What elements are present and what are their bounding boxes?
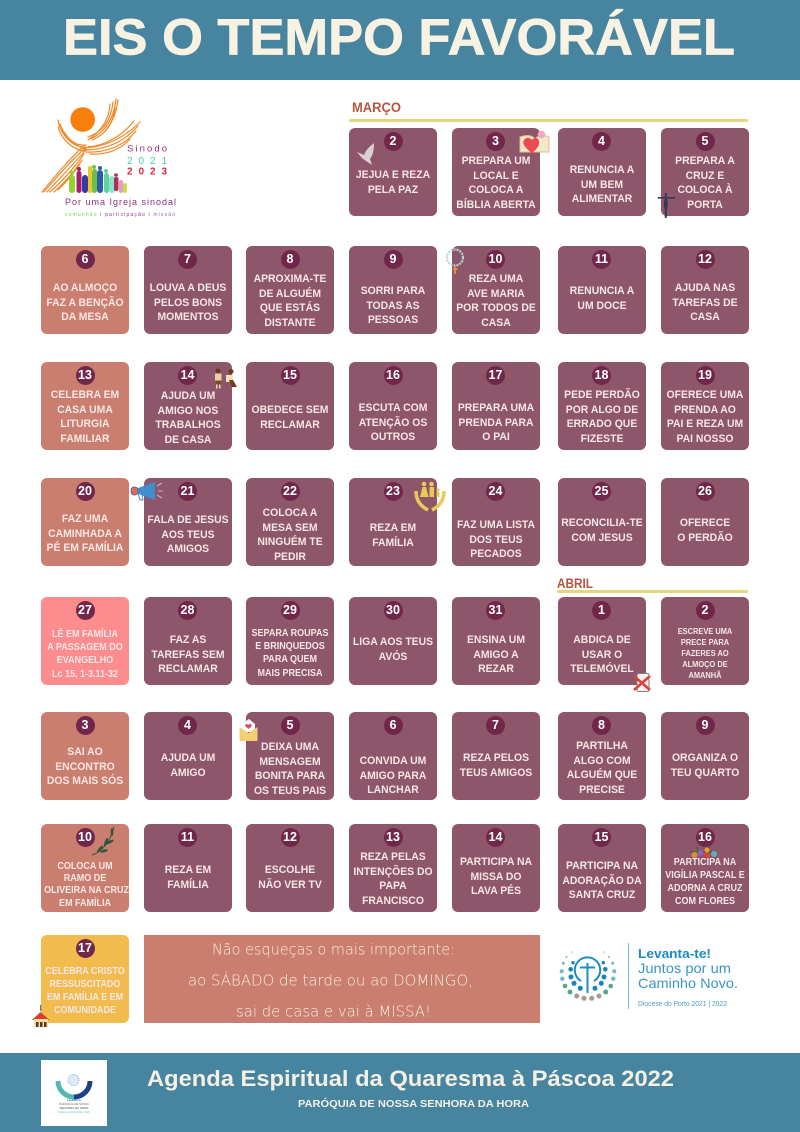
card: março 4: ALIMENTAR <box>571 193 632 205</box>
card: março 10: CASA <box>481 317 510 329</box>
footer band <box>0 1053 800 1132</box>
card: março 6: 6 <box>82 252 88 266</box>
card: março 14 <box>144 362 232 450</box>
parish logo box <box>41 1060 107 1126</box>
card: abril 14: LAVA PÉS <box>470 885 521 897</box>
card: abril 14: PARTICIPA NA <box>459 856 532 868</box>
card: abril 15: ADORAÇÃO DA <box>562 875 641 887</box>
icon: olive branch <box>92 827 114 855</box>
card: março 2: JEJUA E REZA <box>356 169 430 181</box>
card: abril 8: 8 <box>598 718 605 732</box>
card: abril 6: AMIGO PARA <box>360 770 426 782</box>
card: abril 3: ENCONTRO <box>55 761 115 773</box>
card: abril 17: EM FAMÍLIA E EM <box>47 992 123 1003</box>
card: abril 7: TEUS AMIGOS <box>459 767 532 779</box>
card: março 3: 3 <box>492 134 499 148</box>
card: abril 1: ABDICA DE <box>573 634 630 646</box>
card: março 3: BÍBLIA ABERTA <box>456 199 535 211</box>
card: março 10: AVE MARIA <box>467 288 524 300</box>
card: abril 7: REZA PELOS <box>462 752 529 764</box>
card: março 22: MESA SEM <box>262 522 318 534</box>
card: março 25: RECONCILIA-TE <box>561 517 642 529</box>
card: março 22: 22 <box>283 484 297 498</box>
card: março 6: FAZ A BENÇÃO <box>46 297 124 309</box>
card: março 23: FAMÍLIA <box>372 537 414 549</box>
card: março 26: 26 <box>698 484 712 498</box>
logo: paróquia: PARÓQUIA DE NOSSA <box>59 1101 89 1106</box>
card: abril 16: VIGÍLIA PASCAL E <box>665 870 745 881</box>
logo: levanta-te diocese: Diocese do Porto 2021 | 2022 <box>638 1001 727 1008</box>
card: abril 5: OS TEUS PAIS <box>254 785 326 797</box>
card: abril 1: USAR O <box>581 649 622 661</box>
card: abril 3: 3 <box>82 718 88 732</box>
card: março 12 <box>661 246 749 334</box>
card: abril 7 <box>452 712 540 800</box>
card: abril 11 <box>144 824 232 912</box>
card: abril 14: MISSA DO <box>470 871 521 883</box>
card: abril 12: 12 <box>283 830 297 844</box>
card: abril 9 <box>661 712 749 800</box>
card: abril 9: TEU QUARTO <box>671 767 739 779</box>
logo: paróquia: Diocese do Porto 2021 | 2022 <box>58 1111 90 1114</box>
card: março 4: RENUNCIA A <box>569 164 634 176</box>
card: março 12: AJUDA NAS <box>675 282 735 294</box>
card: abril 5: MENSAGEM <box>259 756 321 768</box>
card: abril 17: COMUNIDADE <box>54 1005 116 1016</box>
logo: levanta-te diocese: Caminho Novo. <box>638 975 738 991</box>
card: março 8: DISTANTE <box>264 317 316 329</box>
card: março 28: RECLAMAR <box>158 663 217 675</box>
card: março 5: PREPARA A <box>675 155 735 167</box>
month rule: abril <box>557 590 748 592</box>
card: março 16 <box>349 362 437 450</box>
card: abril 8: PARTILHA <box>576 740 627 752</box>
card: abril 17: CELEBRA CRISTO <box>45 966 125 976</box>
card: março 6: DA MESA <box>61 311 109 323</box>
card: março 7: LOUVA A DEUS <box>149 282 226 294</box>
card: abril 10: 10 <box>78 830 92 844</box>
card: março 18: 18 <box>595 368 608 382</box>
card: março 8: QUE ESTÁS <box>260 302 320 314</box>
card: março 7: MOMENTOS <box>157 311 218 323</box>
card: março 17: PREPARA UMA <box>457 402 534 414</box>
card: março 20: PÉ EM FAMÍLIA <box>47 542 123 554</box>
card: março 17: PRENDA PARA <box>458 417 533 429</box>
logo: sínodo 2021-2023: Sinodo <box>127 144 167 154</box>
card: março 3: COLOCA A <box>468 184 523 196</box>
logo: paróquia: Levanta-te <box>67 1098 81 1102</box>
card: abril 9: ORGANIZA O <box>672 752 738 764</box>
card: abril 16: COM FLORES <box>675 896 735 907</box>
card: abril 2: ESCREVE UMA <box>678 626 732 636</box>
card: abril 2: AMANHÃ <box>688 670 722 680</box>
card: abril 8: ALGO COM <box>573 755 630 767</box>
card: março 3 <box>452 128 540 216</box>
card: março 3: PREPARA UM <box>461 155 530 167</box>
card: abril 5 <box>246 712 334 800</box>
logo: paróquia: SENHORA DA HORA <box>59 1106 89 1110</box>
card: março 22: COLOCA A <box>263 507 317 519</box>
card: abril 10: COLOCA UM <box>57 860 113 872</box>
card: março 28: 28 <box>181 603 194 617</box>
card: abril 13: 13 <box>386 830 400 844</box>
card: março 18: POR ALGO DE <box>565 404 638 416</box>
card: março 8: DE ALGUÉM <box>259 288 321 300</box>
card: março 27: A PASSAGEM DO <box>47 642 123 653</box>
card: março 19: PAI NOSSO <box>676 433 734 445</box>
card: março 25: COM JESUS <box>571 532 632 544</box>
card: abril 17: 17 <box>78 941 92 955</box>
card: março 30 <box>349 597 437 685</box>
card: março 16: 16 <box>386 368 400 382</box>
card: abril 2: FAZERES AO <box>681 648 729 658</box>
icon: megaphone <box>131 482 163 500</box>
card: março 16: OUTROS <box>371 431 415 443</box>
callout text: sai de casa e vai à MISSA! <box>236 1002 431 1020</box>
card: março 23 <box>349 478 437 566</box>
card: abril 8: PRECISE <box>579 784 624 796</box>
card: abril 3: SAI AO <box>67 746 103 758</box>
card: março 31: 31 <box>489 603 502 617</box>
card: abril 1: TELEMÓVEL <box>570 663 633 675</box>
logo: sínodo 2021-2023: Por uma Igreja sinodal <box>65 197 176 207</box>
card: março 28: FAZ AS <box>169 634 206 646</box>
card: abril 15: 15 <box>595 830 608 844</box>
card: abril 10: RAMO DE <box>64 873 106 884</box>
card: março 19: OFERECE UMA <box>667 389 743 401</box>
logo: sínodo 2021-2023: 2021 <box>127 156 167 167</box>
card: março 22: PEDIR <box>274 551 306 563</box>
card: abril 14: 14 <box>489 830 502 844</box>
card: março 27: Lc 15, 1-3.11-32 <box>52 669 118 680</box>
card: abril 10: EM FAMÍLIA <box>59 898 111 909</box>
card: março 20 <box>41 478 129 566</box>
card: abril 14 <box>452 824 540 912</box>
footer subtitle: PARÓQUIA DE NOSSA SENHORA DA HORA <box>298 1097 529 1110</box>
card: março 19 <box>661 362 749 450</box>
card: abril 8: ALGUÉM QUE <box>566 769 637 781</box>
card: abril 1 <box>558 597 646 685</box>
card: abril 10 <box>41 824 129 912</box>
card: março 28 <box>144 597 232 685</box>
callout text <box>188 940 473 1020</box>
card: abril 6 <box>349 712 437 800</box>
card: abril 2: 2 <box>702 603 708 617</box>
card: março 29: E BRINQUEDOS <box>255 641 325 652</box>
card: março 9: PESSOAS <box>368 314 418 326</box>
logo: sínodo 2021-2023: 2023 <box>127 166 167 178</box>
card: abril 6: 6 <box>390 718 396 732</box>
icon: love letter <box>240 719 258 741</box>
heading: março: MARÇO <box>352 100 401 115</box>
card: abril 16 <box>661 824 749 912</box>
card: março 15 <box>246 362 334 450</box>
logo: levanta-te diocese: Juntos por um <box>638 960 731 976</box>
icon: dove <box>357 143 374 165</box>
card: março 26: OFERECE <box>680 517 730 529</box>
card: abril 4: 4 <box>184 718 191 732</box>
card: abril 6: CONVIDA UM <box>360 755 426 767</box>
card: março 24: FAZ UMA LISTA <box>456 519 535 531</box>
card: março 8 <box>246 246 334 334</box>
logo: levanta-te diocese: Levanta-te! <box>638 946 711 961</box>
card: março 23: REZA EM <box>370 522 416 534</box>
card: março 14: 14 <box>181 368 194 382</box>
card: março 17: 17 <box>489 368 502 382</box>
card: abril 13: INTENÇÕES DO <box>353 866 433 878</box>
card: março 12: CASA <box>690 311 720 323</box>
card: março 9 <box>349 246 437 334</box>
card: março 19: PRENDA AO <box>674 404 736 416</box>
card: março 13 <box>41 362 129 450</box>
card: março 11 <box>558 246 646 334</box>
card: abril 3: DOS MAIS SÓS <box>47 775 123 787</box>
card: março 24: PECADOS <box>470 548 521 560</box>
card: março 12: 12 <box>698 252 712 266</box>
card: março 29: MAIS PRECISA <box>257 668 323 679</box>
card: março 15: 15 <box>283 368 297 382</box>
heading: abril: ABRIL <box>557 576 593 591</box>
card: março 30: AVÓS <box>379 651 407 663</box>
card: abril 16: ADORNA A CRUZ <box>667 883 743 894</box>
card: abril 5: DEIXA UMA <box>261 741 319 753</box>
card: abril 12: NÃO VER TV <box>258 879 322 891</box>
card: abril 12 <box>246 824 334 912</box>
card: abril 10: OLIVEIRA NA CRUZ <box>44 885 129 896</box>
card: março 10: 10 <box>489 252 502 266</box>
icon: children helping <box>215 368 237 388</box>
card: abril 11: 11 <box>181 830 194 844</box>
card: abril 2: PRECE PARA <box>681 638 729 646</box>
card: março 3: LOCAL E <box>473 170 518 182</box>
card: março 13: 13 <box>78 368 92 382</box>
card: março 15: OBEDECE SEM <box>252 404 328 416</box>
card: março 31: AMIGO A <box>473 649 518 661</box>
card: março 22: NINGUÉM TE <box>257 536 323 548</box>
card: março 14: AMIGO NOS <box>157 405 218 417</box>
icon: church <box>32 1005 50 1027</box>
card: março 11: UM DOCE <box>577 300 626 312</box>
card: março 16: ESCUTA COM <box>359 402 427 414</box>
card: março 11: 11 <box>595 252 608 266</box>
card: abril 17 <box>41 935 129 1023</box>
card: abril 11: FAMÍLIA <box>167 879 208 891</box>
card: abril 1: 1 <box>598 603 605 617</box>
icon: crucifix <box>658 193 675 218</box>
card: março 7: 7 <box>184 252 191 266</box>
card: março 9: 9 <box>390 252 396 266</box>
card: março 27: LÊ EM FAMÍLIA <box>52 629 118 640</box>
card: março 21 <box>144 478 232 566</box>
card: março 24 <box>452 478 540 566</box>
header band <box>0 0 800 80</box>
logo: sínodo 2021-2023: comunhão i participação i missão <box>65 212 175 218</box>
card: abril 16: 16 <box>698 830 712 844</box>
card: março 4: UM BEM <box>580 179 623 191</box>
card: abril 4 <box>144 712 232 800</box>
card: março 5: 5 <box>702 134 708 148</box>
card: março 5: CRUZ E <box>686 170 724 182</box>
card: abril 15: SANTA CRUZ <box>568 889 635 901</box>
card: março 26: O PERDÃO <box>677 532 733 544</box>
card: março 31 <box>452 597 540 685</box>
card: março 2 <box>349 128 437 216</box>
card: março 16: ATENÇÃO OS <box>359 417 427 429</box>
card: março 19: PAI E REZA UM <box>667 418 743 430</box>
card: março 14: TRABALHOS <box>155 419 220 431</box>
card: março 4 <box>558 128 646 216</box>
card: março 27 <box>41 597 129 685</box>
card: março 9: SORRI PARA <box>361 285 425 297</box>
card: abril 13 <box>349 824 437 912</box>
card: março 17: O PAI <box>482 431 509 443</box>
card: março 14: AJUDA UM <box>160 390 215 402</box>
card: março 10: REZA UMA <box>468 273 523 285</box>
icon: rosary <box>447 250 463 274</box>
card: março 25: 25 <box>595 484 608 498</box>
card: março 9: TODAS AS <box>366 300 420 312</box>
card: março 21: AMIGOS <box>166 543 209 555</box>
card: março 12: TAREFAS DE <box>672 297 738 309</box>
card: março 18: FIZESTE <box>580 433 623 445</box>
card: abril 2 <box>661 597 749 685</box>
card: abril 13: REZA PELAS <box>360 851 426 863</box>
card: março 13: LITURGIA <box>60 418 110 430</box>
card: março 10 <box>452 246 540 334</box>
card: março 4: 4 <box>598 134 605 148</box>
card: março 6: AO ALMOÇO <box>53 282 117 294</box>
card: março 15: RECLAMAR <box>260 419 320 431</box>
card: março 5: COLOCA À <box>677 184 733 196</box>
card: março 14: DE CASA <box>164 434 211 446</box>
card: março 30: 30 <box>386 603 400 617</box>
card: março 29: SEPARA ROUPAS <box>252 628 328 639</box>
card: março 10: POR TODOS DE <box>456 302 535 314</box>
card: abril 13: FRANCISCO <box>362 895 424 907</box>
logo: levanta-te diocese <box>560 943 738 1009</box>
card: março 24: DOS TEUS <box>469 534 522 546</box>
card: abril 17: RESSUSCITADO <box>50 979 120 990</box>
card: abril 8 <box>558 712 646 800</box>
card: março 21: AOS TEUS <box>161 529 214 541</box>
card: março 20: 20 <box>78 484 92 498</box>
card: março 2: PELA PAZ <box>368 184 418 196</box>
card: março 31: REZAR <box>478 663 513 675</box>
logo: sínodo 2021-2023 <box>42 99 176 218</box>
card: março 21: 21 <box>181 484 194 498</box>
card: março 23: 23 <box>386 484 400 498</box>
logo: paróquia <box>58 1074 90 1114</box>
icon: hands holding family <box>416 482 444 510</box>
panel: missa callout <box>144 935 540 1023</box>
card: março 5 <box>661 128 749 216</box>
card: março 31: ENSINA UM <box>466 634 525 646</box>
card: abril 2: ALMOÇO DE <box>682 660 728 668</box>
card: março 8: APROXIMA-TE <box>254 273 326 285</box>
card: março 27: 27 <box>78 603 92 617</box>
icon: crossed phone <box>634 674 650 692</box>
card: março 19: 19 <box>698 368 712 382</box>
card: abril 15 <box>558 824 646 912</box>
card: março 5: PORTA <box>687 199 723 211</box>
card: abril 5: 5 <box>287 718 293 732</box>
footer title: Agenda Espiritual da Quaresma à Páscoa 2022 <box>147 1066 674 1091</box>
card: abril 9: 9 <box>702 718 708 732</box>
card: março 2: 2 <box>390 134 396 148</box>
card: março 11: RENUNCIA A <box>569 285 634 297</box>
icon: flowers <box>690 846 717 858</box>
card: março 21: FALA DE JESUS <box>147 514 228 526</box>
card: março 20: FAZ UMA <box>62 513 108 525</box>
card: abril 13: PAPA <box>379 880 407 892</box>
card: março 7 <box>144 246 232 334</box>
card: abril 12: ESCOLHE <box>265 864 315 876</box>
card: abril 5: BONITA PARA <box>255 770 325 782</box>
icon: open bible with hearts <box>520 131 549 153</box>
card: março 18: ERRADO QUE <box>566 418 637 430</box>
card: março 25 <box>558 478 646 566</box>
card: março 13: CASA UMA <box>57 404 113 416</box>
card: abril 3 <box>41 712 129 800</box>
card: março 27: EVANGELHO <box>57 655 113 666</box>
card: março 7: PELOS BONS <box>153 297 222 309</box>
card: março 29 <box>246 597 334 685</box>
card: março 29: 29 <box>283 603 297 617</box>
card: março 17 <box>452 362 540 450</box>
card: abril 4: AJUDA UM <box>160 752 215 764</box>
month rule: março <box>349 119 748 122</box>
title: EIS O TEMPO FAVORÁVEL <box>63 8 735 66</box>
card: abril 15: PARTICIPA NA <box>565 860 638 872</box>
card: março 26 <box>661 478 749 566</box>
card: abril 4: AMIGO <box>170 767 205 779</box>
card: março 18: PEDE PERDÃO <box>564 389 639 401</box>
card: março 20: CAMINHADA A <box>48 528 122 540</box>
card: março 24: 24 <box>489 484 502 498</box>
card: abril 7: 7 <box>492 718 499 732</box>
card: abril 11: REZA EM <box>164 864 211 876</box>
card: março 29: PARA QUEM <box>263 654 317 665</box>
card: março 6 <box>41 246 129 334</box>
card: março 30: LIGA AOS TEUS <box>353 636 433 648</box>
card: março 13: FAMILIAR <box>60 433 110 445</box>
card: março 13: CELEBRA EM <box>51 389 119 401</box>
card: março 18 <box>558 362 646 450</box>
callout text: Não esqueças o mais importante: <box>212 940 455 958</box>
card: abril 16: PARTICIPA NA <box>674 857 736 868</box>
card: abril 6: LANCHAR <box>367 784 419 796</box>
card: março 8: 8 <box>287 252 293 266</box>
card: março 28: TAREFAS SEM <box>151 649 224 661</box>
card: março 22 <box>246 478 334 566</box>
callout text: ao SÁBADO de tarde ou ao DOMINGO, <box>188 970 473 990</box>
